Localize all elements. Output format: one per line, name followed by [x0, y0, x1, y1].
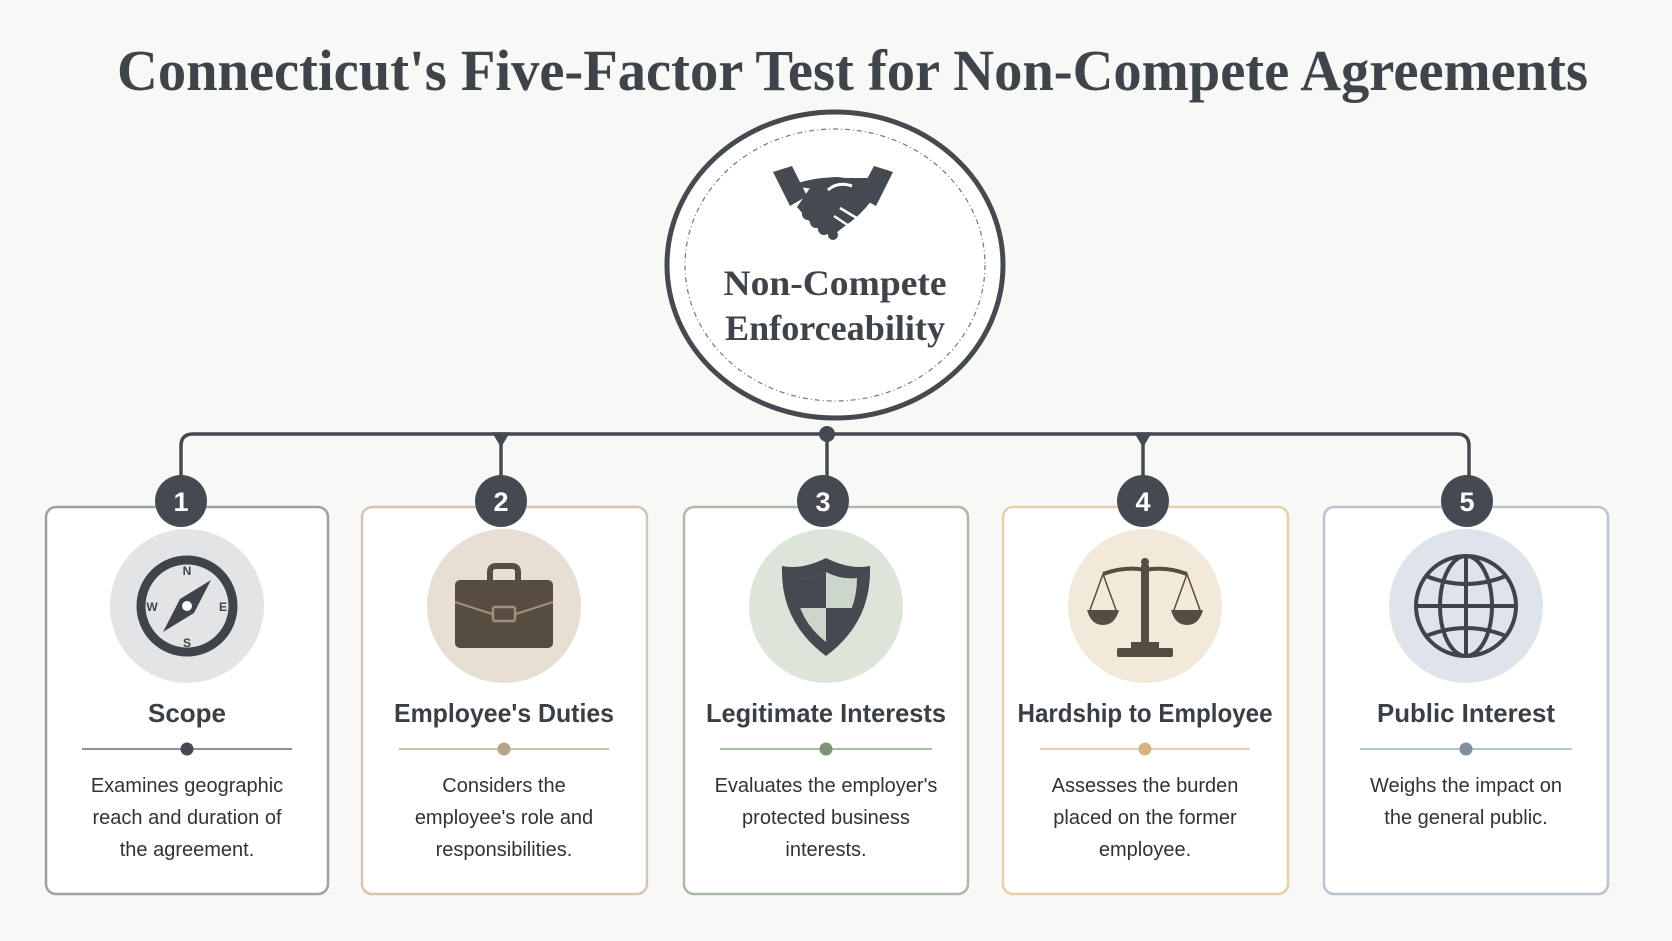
panel: 4 Hardship to Employee: employee. — [1099, 839, 1191, 861]
central circle: Non-Compete Enforceability: Enforceability — [725, 308, 945, 348]
panel: 1 Scope: reach and duration of — [92, 807, 282, 829]
panel: 3 Legitimate Interests: interests. — [785, 839, 867, 861]
icon: compass: W — [146, 600, 158, 614]
panel: 2 Employee's Duties: employee's role and — [415, 807, 593, 829]
icon: globe — [1416, 556, 1516, 656]
icon: compass: N — [183, 564, 191, 578]
panel: 1 Scope: 1 — [173, 487, 189, 517]
icon: briefcase — [455, 566, 553, 648]
panel: 4 Hardship to Employee — [1003, 475, 1288, 894]
panel: 3 Legitimate Interests: 3 — [815, 487, 831, 517]
icon: shield — [782, 558, 870, 656]
panel: 4 Hardship to Employee: Hardship to Employee — [1018, 698, 1272, 728]
panel: 5 Public Interest: Weighs the impact on — [1370, 775, 1562, 797]
panel: 2 Employee's Duties: Employee's Duties — [394, 698, 614, 728]
panel: 3 Legitimate Interests — [684, 475, 968, 894]
panel: 1 Scope: Examines geographic — [91, 775, 283, 797]
title: Connecticut's Five-Factor Test for Non-Compete Agreements — [117, 38, 1588, 103]
panel: 1 Scope — [46, 475, 328, 894]
central circle: Non-Compete Enforceability — [667, 112, 1003, 418]
icon: handshake — [773, 166, 893, 240]
panel: 5 Public Interest: Public Interest — [1377, 698, 1555, 728]
panel: 4 Hardship to Employee: placed on the former — [1053, 807, 1237, 829]
center dot — [819, 426, 835, 442]
panel: 5 Public Interest — [1324, 475, 1608, 894]
icon: scales — [1087, 558, 1203, 657]
panel: 2 Employee's Duties — [362, 475, 647, 894]
panel: 5 Public Interest: the general public. — [1384, 807, 1548, 829]
connector lines — [181, 434, 1469, 478]
panel: 5 Public Interest: 5 — [1459, 487, 1475, 517]
panel: 2 Employee's Duties: Considers the — [442, 775, 566, 797]
panel: 1 Scope: Scope — [148, 698, 226, 728]
panel: 2 Employee's Duties: 2 — [493, 487, 509, 517]
panel: 3 Legitimate Interests: Legitimate Interests — [706, 698, 946, 728]
panel: 3 Legitimate Interests: protected business — [742, 807, 910, 829]
panel: 4 Hardship to Employee: 4 — [1135, 487, 1151, 517]
panel: 3 Legitimate Interests: Evaluates the employer's — [715, 775, 937, 797]
icon: compass — [141, 560, 233, 652]
panel: 2 Employee's Duties: responsibilities. — [436, 839, 572, 861]
panel: 1 Scope: the agreement. — [120, 839, 254, 861]
icon: compass: E — [219, 600, 227, 614]
panel: 4 Hardship to Employee: Assesses the burden — [1052, 775, 1238, 797]
central circle: Non-Compete Enforceability: Non-Compete — [724, 263, 947, 303]
icon: compass: S — [183, 636, 191, 650]
